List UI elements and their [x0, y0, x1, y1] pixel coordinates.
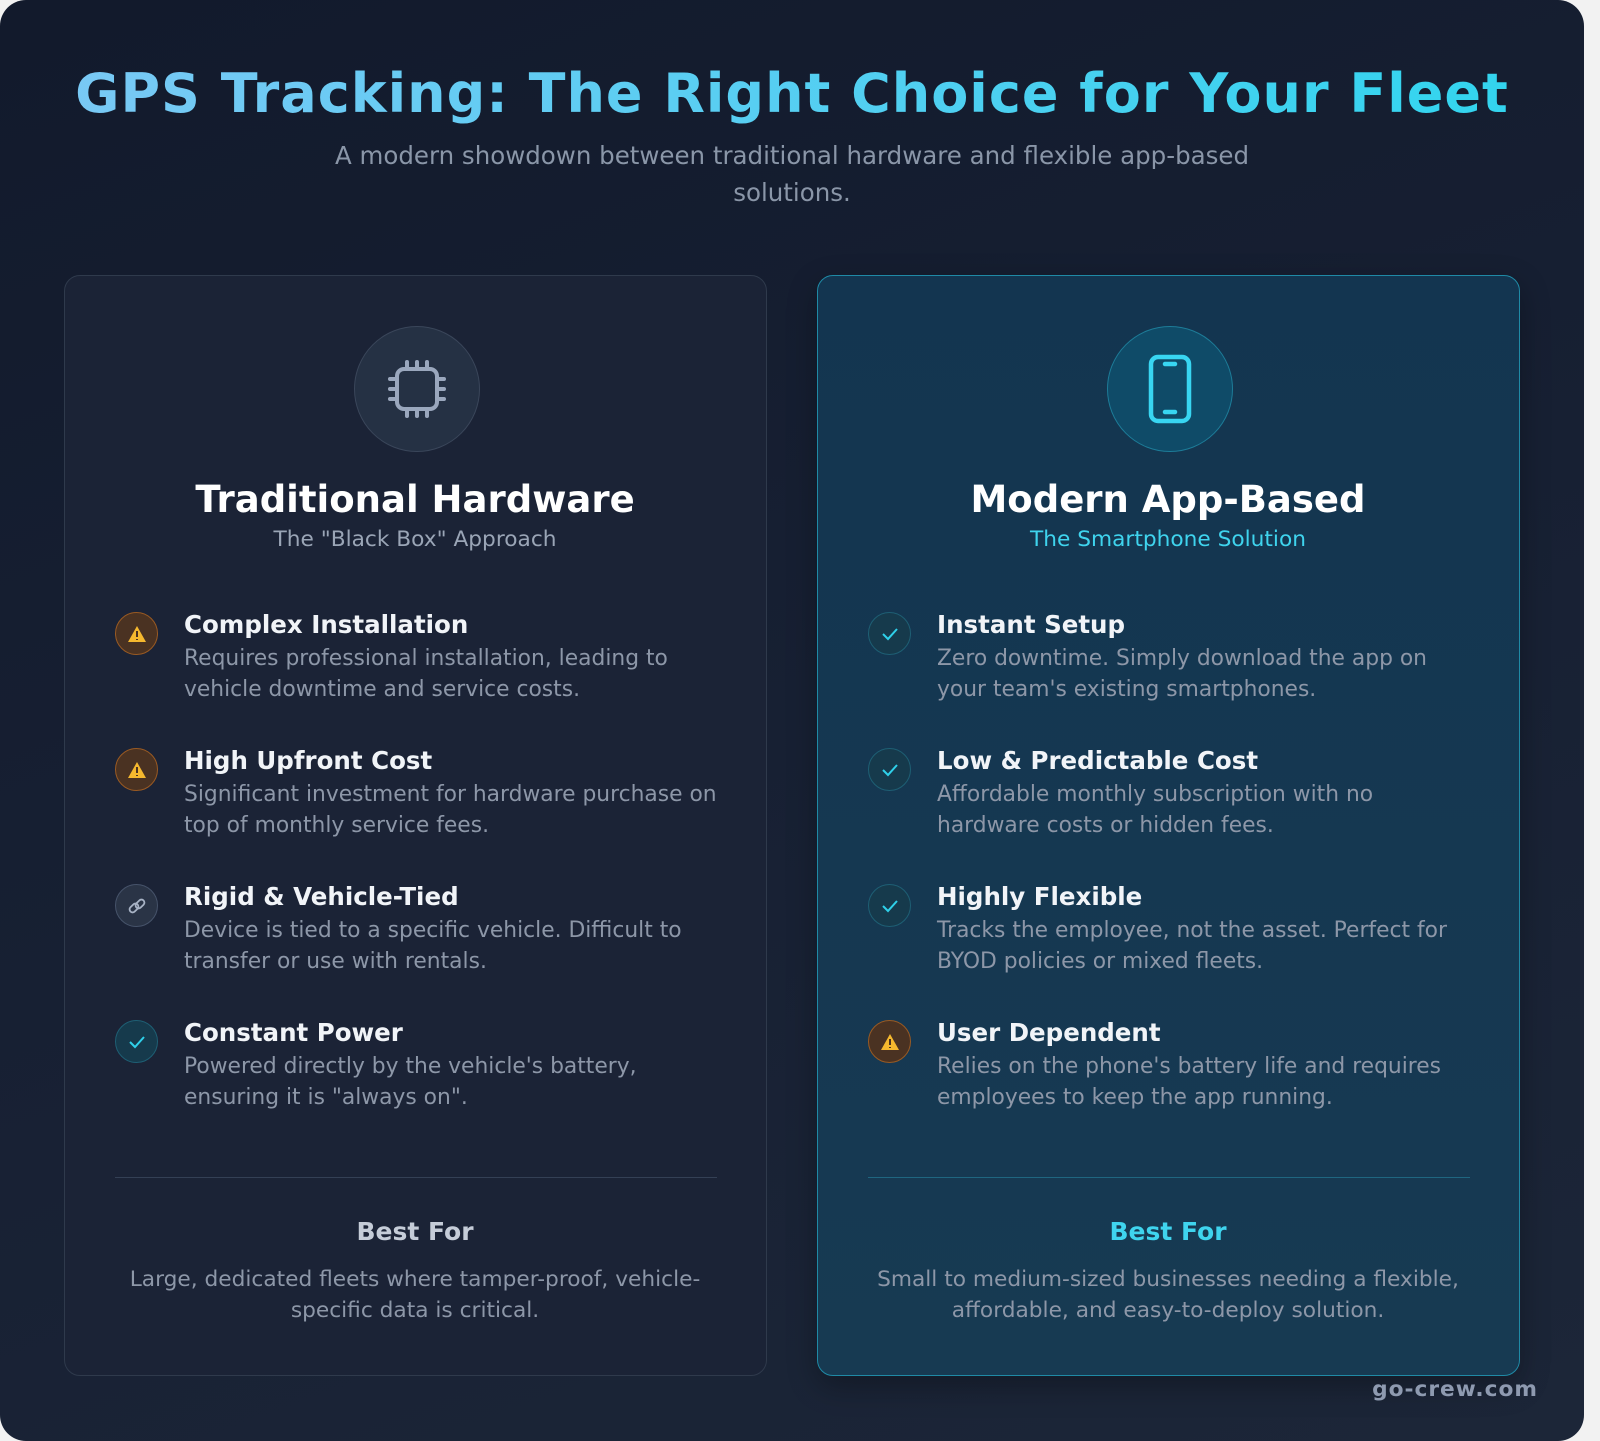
item: complex installation: Complex Installation [184, 610, 468, 639]
item: high upfront cost [115, 746, 717, 838]
item: instant setup: Instant Setup [937, 610, 1125, 639]
best for heading: Best For [1109, 1217, 1227, 1246]
subtitle: A modern showdown between traditional hardware and flexible app-based solutions. [335, 141, 1249, 207]
item: rigid: Rigid & Vehicle-Tied [184, 882, 459, 911]
title: GPS Tracking: The Right Choice for Your Fleet [75, 62, 1509, 125]
item: flexible: Tracks the employee, not the asset. Perfect for BYOD policies or mixed fleets. [937, 918, 1447, 974]
item: high upfront cost: High Upfront Cost [184, 746, 432, 775]
heading: Modern App-Based [970, 478, 1366, 521]
item: rigid [115, 882, 682, 974]
item: user dependent: User Dependent [937, 1018, 1161, 1047]
panel: traditional hardware [64, 275, 767, 1376]
best for heading: Best For [356, 1217, 474, 1246]
item: user dependent: Relies on the phone's battery life and requires employees to keep the app running. [937, 1054, 1441, 1110]
icon: smartphone [1107, 326, 1233, 452]
item: instant setup [868, 610, 1427, 702]
item: flexible: Highly Flexible [937, 882, 1142, 911]
item: low cost: Low & Predictable Cost [937, 746, 1258, 775]
item: constant power: Constant Power [184, 1018, 403, 1047]
item: complex installation: Requires professional installation, leading to vehicle downtime and service costs. [184, 646, 668, 702]
item: rigid: Device is tied to a specific vehicle. Difficult to transfer or use with rentals. [184, 918, 682, 974]
item: high upfront cost: Significant investment for hardware purchase on top of monthly service fees. [184, 782, 717, 838]
best for text: Large, dedicated fleets where tamper-proof, vehicle-specific data is critical. [130, 1267, 700, 1323]
panel: modern app-based [817, 275, 1520, 1376]
item: user dependent [868, 1018, 1441, 1110]
item: low cost [868, 746, 1373, 838]
item: constant power [115, 1018, 637, 1110]
item: flexible [868, 882, 1447, 974]
subheading: The Smartphone Solution [1030, 527, 1306, 552]
subheading: The "Black Box" Approach [274, 527, 556, 552]
icon: chip [354, 326, 480, 452]
best for text: Small to medium-sized businesses needing a flexible, affordable, and easy-to-deploy solution. [877, 1267, 1459, 1323]
footer brand: go-crew.com [1372, 1377, 1538, 1402]
item: low cost: Affordable monthly subscription with no hardware costs or hidden fees. [937, 782, 1373, 838]
item: constant power: Powered directly by the vehicle's battery, ensuring it is "always on". [184, 1054, 637, 1110]
item: instant setup: Zero downtime. Simply download the app on your team's existing smartphones. [937, 646, 1427, 702]
item: complex installation [115, 610, 668, 702]
heading: Traditional Hardware [195, 478, 635, 521]
